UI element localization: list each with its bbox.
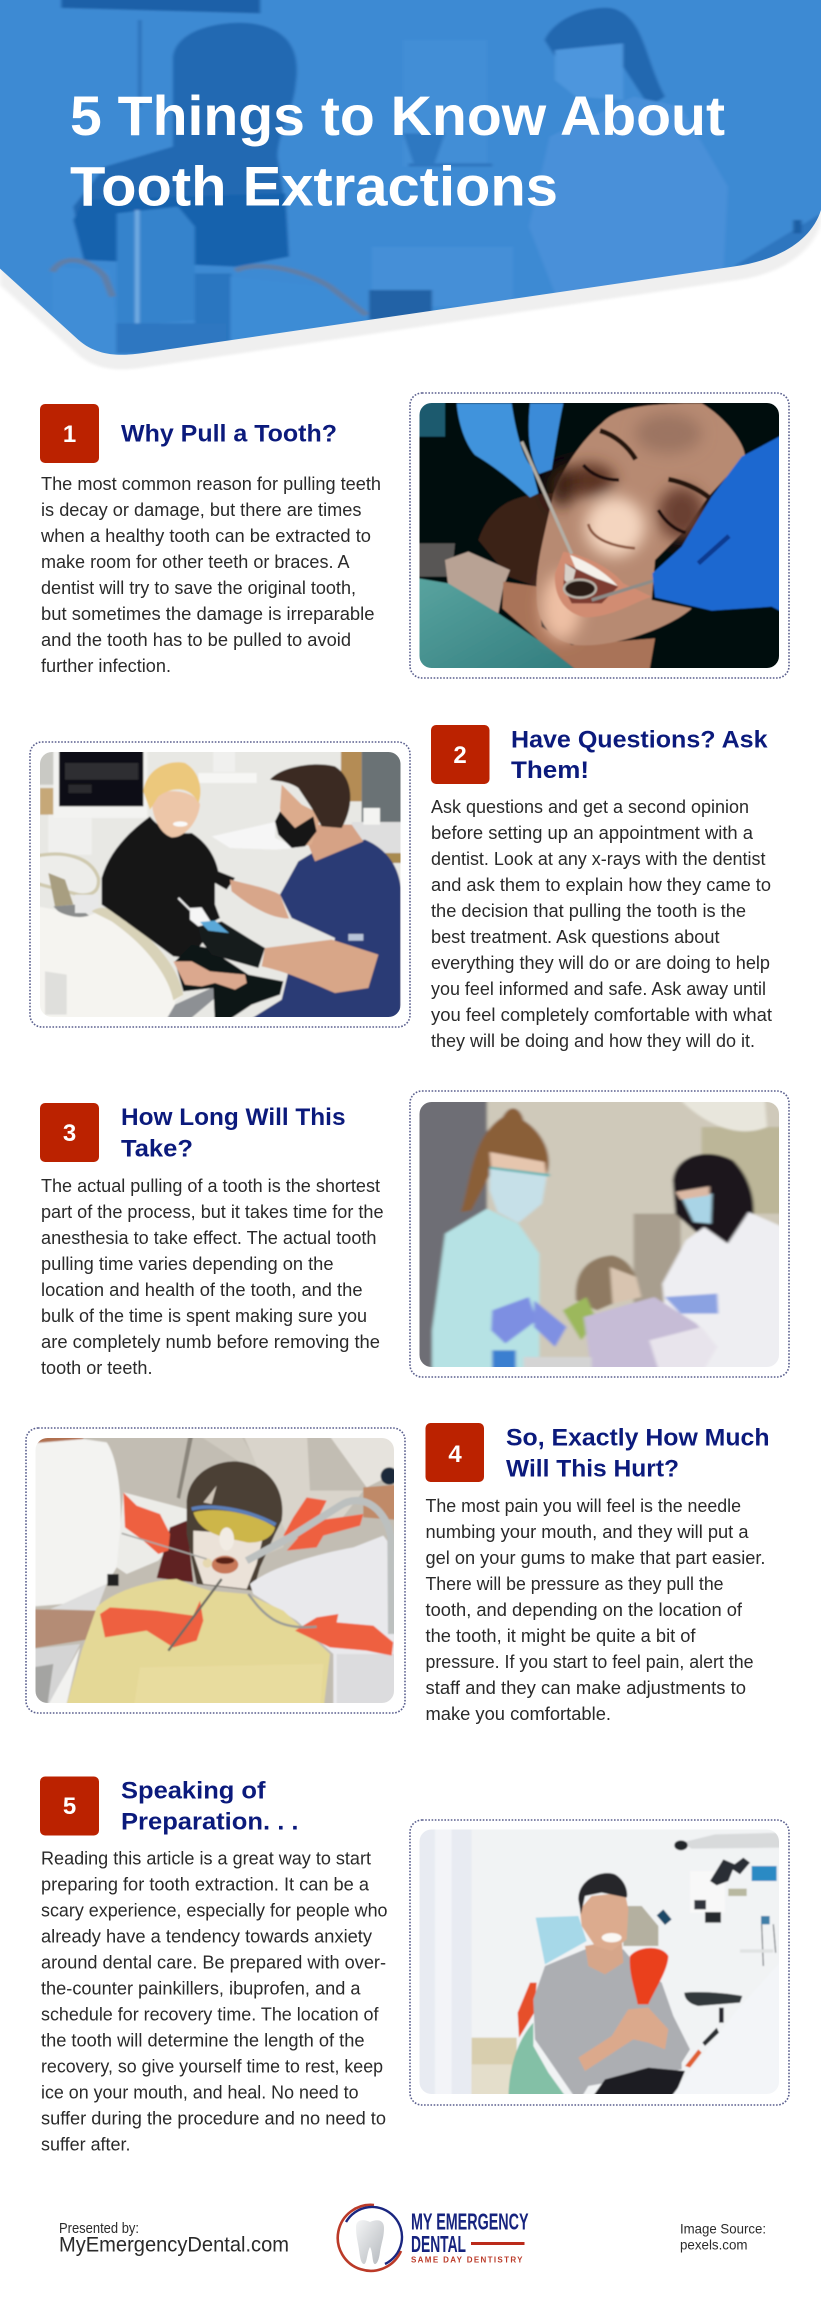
number badge 1: 1 [63, 421, 76, 448]
body text 2 [431, 797, 772, 1051]
body text 5: scary experience, especially for people who [41, 1900, 388, 1920]
body text 4: pressure. If you start to feel pain, alert the [426, 1652, 754, 1672]
body text 5: preparing for tooth extraction. It can be a [41, 1874, 370, 1894]
number badge 5: 5 [63, 1793, 76, 1820]
heading 1: Why Pull a Tooth? [121, 420, 337, 448]
number badge 2 [431, 725, 490, 784]
heading 3: How Long Will This [121, 1104, 346, 1131]
body text 4: There will be pressure as they pull the [426, 1574, 724, 1594]
body text 2: the decision that pulling the tooth is the [431, 901, 746, 921]
panel: section 4 how much will this hurt [23, 1423, 770, 1724]
body text 5: already have a tendency towards anxiety [41, 1926, 372, 1946]
body text 1 [40, 474, 381, 676]
body text 1: further infection. [41, 656, 171, 676]
body text 3: anesthesia to take effect. The actual tooth [41, 1228, 376, 1248]
footer: presented by: MyEmergencyDental.com [59, 2234, 289, 2256]
footer: presented by: Presented by: [59, 2221, 139, 2237]
body text 5: recovery, so give yourself time to rest, keep [41, 2056, 383, 2076]
title: 5 Things to Know About [70, 84, 725, 147]
body text 5 [41, 1848, 388, 2154]
body text 4: tooth, and depending on the location of [426, 1600, 743, 1620]
body text 2: you feel informed and safe. Ask away until [431, 979, 766, 999]
body text 5: the tooth will determine the length of the [41, 2030, 364, 2050]
number badge 3 [40, 1103, 99, 1162]
heading 5: Speaking of [121, 1778, 267, 1804]
photo 1: dentist examining mouth [408, 393, 792, 680]
logo wordmark: SAME DAY DENTISTRY [411, 2256, 523, 2264]
body text 5: ice on your mouth, and heal. No need to [41, 2082, 358, 2102]
body text 2: before setting up an appointment with a [431, 823, 754, 843]
heading 5: Preparation. . . [121, 1808, 298, 1836]
body text 1: when a healthy tooth can be extracted to [40, 526, 371, 546]
body text 2: everything they will do or are doing to help [431, 953, 770, 973]
title: Tooth Extractions [70, 154, 558, 218]
heading 4 [506, 1424, 770, 1482]
body text 2: dentist. Look at any x-rays with the dentist [431, 849, 766, 869]
body text 3: pulling time varies depending on the [41, 1254, 334, 1274]
logo wordmark: DENTAL [411, 2231, 466, 2257]
body text 1: make room for other teeth or braces. A [41, 552, 350, 572]
panel: section 2 have questions [28, 725, 772, 1051]
panel: section 3 how long [40, 1091, 791, 1378]
body text 5: the-counter painkillers, ibuprofen, and a [41, 1978, 361, 1998]
logo tooth icon [356, 2220, 384, 2264]
heading 2: Have Questions? Ask [511, 726, 768, 754]
number badge 1 [40, 404, 99, 463]
number badge 5 [40, 1776, 99, 1836]
body text 1: dentist will try to save the original tooth, [41, 578, 356, 598]
body text 4: the tooth, it might be quite a bit of [426, 1626, 697, 1646]
photo 3: two dental staff with patient [409, 1091, 791, 1377]
body text 5: schedule for recovery time. The location of [41, 2004, 379, 2024]
logo wordmark [411, 2208, 528, 2264]
number badge 3: 3 [63, 1120, 76, 1147]
body text 4: numbing your mouth, and they will put a [426, 1522, 749, 1542]
title [70, 84, 725, 218]
number badge 2: 2 [453, 742, 467, 769]
number badge 4: 4 [448, 1441, 462, 1468]
body text 3: bulk of the time is spent making sure you [41, 1306, 367, 1326]
body text 1: The most common reason for pulling teeth [41, 474, 381, 494]
footer: image source: pexels.com [680, 2236, 748, 2252]
body text 4: staff and they can make adjustments to [426, 1678, 746, 1698]
heading 3 [121, 1104, 346, 1162]
footer: logo [338, 2205, 528, 2271]
footer: image source [680, 2220, 766, 2252]
body text 3: part of the process, but it takes time for the [41, 1202, 383, 1222]
logo ring [338, 2205, 402, 2271]
body text 1: and the tooth has to be pulled to avoid [41, 630, 351, 650]
photo 4: patient in goggles with orange gloved hands [23, 1427, 407, 1714]
body text 4: gel on your gums to make that part easier. [426, 1548, 766, 1568]
body text 4: make you comfortable. [426, 1704, 611, 1724]
heading 5 [121, 1778, 298, 1836]
body text 1: but sometimes the damage is irreparable [41, 604, 374, 624]
body text 4 [426, 1496, 766, 1724]
logo wordmark: MY EMERGENCY [411, 2208, 528, 2234]
footer: presented by [59, 2221, 289, 2256]
photo 2: dentist with patient [28, 741, 412, 1028]
body text 2: and ask them to explain how they came to [431, 875, 771, 895]
header banner [0, 0, 821, 407]
footer: image source: Image Source: [680, 2220, 766, 2236]
body text 3: are completely numb before removing the [41, 1332, 380, 1352]
body text 2: you feel completely comfortable with what [431, 1005, 772, 1025]
body text 5: around dental care. Be prepared with over- [41, 1952, 386, 1972]
heading 4: So, Exactly How Much [506, 1424, 770, 1452]
number badge 4 [426, 1423, 484, 1482]
body text 2: Ask questions and get a second opinion [431, 797, 749, 817]
heading 2: Them! [511, 757, 589, 784]
body text 3: tooth or teeth. [41, 1358, 152, 1378]
heading 3: Take? [121, 1136, 193, 1162]
photo 5: smiling man with red mirror [408, 1819, 792, 2106]
panel: section 5 speaking of preparation [40, 1776, 792, 2154]
body text 3: location and health of the tooth, and the [41, 1280, 363, 1300]
heading 4: Will This Hurt? [506, 1456, 679, 1482]
body text 5: suffer during the procedure and no need to [41, 2108, 386, 2128]
body text 2: best treatment. Ask questions about [431, 927, 720, 947]
body text 5: Reading this article is a great way to start [41, 1848, 371, 1868]
body text 2: they will be doing and how they will do it. [431, 1031, 755, 1051]
body text 1: is decay or damage, but there are times [41, 500, 362, 520]
panel: section 1 why pull a tooth [40, 393, 792, 680]
body text 3: The actual pulling of a tooth is the shortest [41, 1176, 380, 1196]
heading 2 [511, 726, 768, 784]
body text 5: suffer after. [41, 2134, 130, 2154]
body text 4: The most pain you will feel is the needle [426, 1496, 741, 1516]
body text 3 [41, 1176, 383, 1378]
